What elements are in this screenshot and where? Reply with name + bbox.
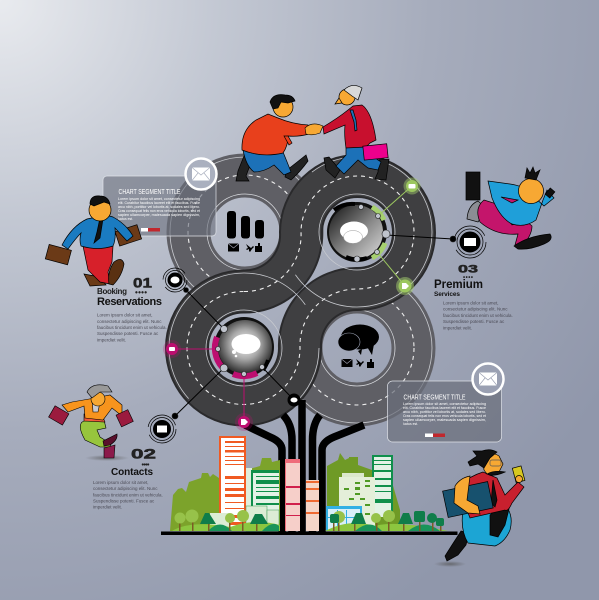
node black small	[288, 394, 300, 406]
body: faucibus tincidunt enim ut vehicula.	[97, 325, 167, 330]
label 03 Premium Services	[434, 264, 513, 330]
body text: sapien ullamcorper, malesuada sapien dignissim,	[403, 418, 486, 422]
icon: speech bubbles	[338, 324, 379, 355]
body text: Lorem ipsum dolor sit amet, consectetur adipiscing	[403, 402, 486, 406]
character: left man blue sweater	[45, 196, 142, 286]
building pale	[339, 473, 375, 527]
label 03 Premium Services: Services	[434, 291, 460, 298]
number: 01	[133, 276, 153, 290]
gray road upper left	[170, 157, 320, 307]
body text	[118, 197, 200, 221]
node 03	[454, 226, 486, 258]
icon: speech bubble	[340, 222, 368, 244]
node pink left	[163, 340, 181, 358]
hub lower left	[214, 317, 274, 377]
tree road stems	[245, 400, 364, 533]
character: lower left man	[49, 385, 133, 461]
trees	[174, 510, 444, 531]
roadway cloverleaf	[169, 157, 432, 423]
heading: CHART SEGMENT TITLE	[118, 187, 180, 196]
icon: speech bubble	[232, 334, 260, 357]
label 01 Booking Reservations	[97, 276, 167, 342]
body text: luctus est.	[403, 422, 418, 426]
building pink	[285, 459, 300, 531]
panel: chart segment lower right	[388, 381, 502, 442]
icon: envelope badge lower right	[472, 364, 504, 394]
icons: mail plane cup upper left	[228, 243, 262, 252]
dark road figure eight	[169, 157, 432, 423]
body	[93, 480, 163, 510]
character: lower right man running	[434, 450, 525, 567]
dots: ••••	[142, 462, 150, 469]
body: consectetur adipiscing elit. Nunc	[93, 486, 158, 491]
body text: Cras consequat felis non eros vehicula lobortis, sed et	[118, 209, 200, 213]
heading: Premium	[434, 279, 483, 291]
heading: Booking	[97, 287, 127, 296]
hub upper right	[327, 202, 387, 262]
body: Suspendisse potenti. Fusce ac	[97, 331, 159, 336]
dots: ••••	[135, 288, 147, 297]
body: Lorem ipsum dolor sit amet,	[443, 300, 499, 306]
body: Lorem ipsum dolor sit amet,	[97, 312, 153, 318]
green silhouette right	[327, 453, 400, 531]
body text: Lorem ipsum dolor sit amet, consectetur adipiscing	[118, 197, 200, 201]
heading: Contacts	[111, 467, 153, 478]
character: handshake right man	[323, 85, 389, 180]
connector dots	[172, 204, 456, 419]
building green	[246, 468, 279, 531]
body: Lorem ipsum dolor sit amet,	[93, 480, 149, 485]
icon: envelope badge upper left	[186, 158, 216, 190]
body text: elit. Curabitur faucibus laoreet elit et faucibus. Fusce	[118, 201, 200, 205]
label 01 Booking Reservations: Reservations	[97, 296, 162, 308]
body: imperdiet velit.	[443, 326, 472, 330]
green silhouette left	[170, 458, 280, 531]
body: consectetur adipiscing elit. Nunc	[443, 306, 508, 312]
character: handshake left man	[236, 95, 309, 181]
building orange	[219, 436, 246, 531]
body: Suspendisse potenti. Fusce ac	[443, 319, 505, 324]
body text: luctus est.	[118, 217, 133, 221]
ground line	[161, 532, 458, 535]
node 02	[148, 415, 176, 443]
panel: chart segment upper left	[103, 176, 216, 236]
connector lines	[172, 186, 453, 422]
node green top	[404, 178, 420, 194]
building blue	[326, 506, 362, 531]
node pink bottom	[235, 413, 253, 431]
body text: Cras consequat felis non eros vehicula lobortis, sed et	[403, 414, 486, 418]
node 01	[163, 268, 187, 292]
icon: bar chart	[227, 211, 264, 238]
building green tower right	[372, 455, 393, 517]
body	[443, 300, 513, 330]
node green bottom	[396, 277, 414, 295]
body: Suspendisse potenti. Fusce ac	[93, 498, 155, 504]
building low left	[210, 506, 279, 531]
icons: mail plane cup lower right	[342, 359, 374, 368]
body: imperdiet velit.	[97, 338, 126, 342]
character: handshake hands	[305, 124, 323, 135]
number: 02	[131, 446, 156, 462]
body text: arcu nibh, porttitor vel lobortis at, sodales sed libero.	[118, 205, 200, 209]
mini bar	[425, 434, 445, 437]
body	[97, 312, 167, 342]
number: 03	[458, 264, 478, 276]
bushes	[172, 522, 448, 531]
body text: elit. Curabitur faucibus laoreet elit et faucibus. Fusce	[403, 406, 486, 410]
body text	[403, 402, 486, 426]
dots: ••••	[463, 275, 473, 281]
body text: sapien ullamcorper, malesuada sapien dignissim,	[118, 213, 200, 217]
body: faucibus tincidunt enim ut vehicula.	[93, 492, 163, 498]
character: right man running	[466, 167, 555, 249]
body text: arcu nibh, porttitor vel lobortis at, sodales sed libero.	[403, 410, 486, 414]
city skyline	[161, 436, 458, 535]
mini bar	[141, 228, 160, 232]
building orange center	[306, 480, 319, 531]
label 02 Contacts	[93, 446, 163, 510]
body: faucibus tincidunt enim ut vehicula.	[443, 313, 513, 318]
body: consectetur adipiscing elit. Nunc	[97, 319, 162, 324]
heading: CHART SEGMENT TITLE	[404, 392, 466, 402]
body: imperdiet velit.	[93, 504, 122, 510]
gray road lower right	[282, 273, 432, 423]
